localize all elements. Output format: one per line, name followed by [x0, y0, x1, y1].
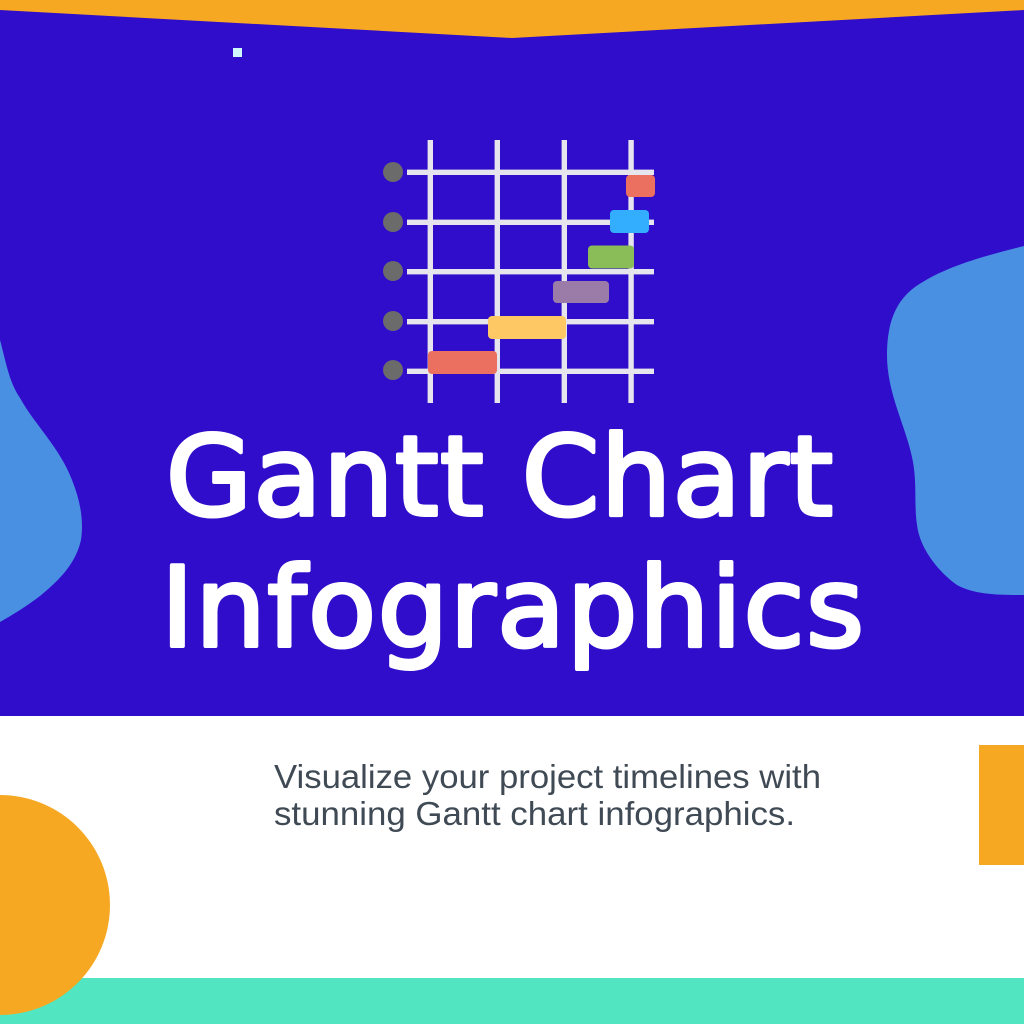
chart grid: [407, 140, 654, 403]
orange circle: [0, 795, 110, 1015]
panel: indigo hero background: [0, 0, 1024, 716]
title: [161, 413, 864, 673]
title: Gantt Chart: [166, 413, 833, 542]
left blue blob: [0, 340, 82, 622]
orange square: [979, 745, 1024, 865]
icon: gantt chart: [383, 140, 655, 403]
panel: white lower section: [0, 716, 1024, 1024]
row markers: [383, 162, 403, 380]
small pale square accent: [233, 48, 242, 57]
subtitle text: [274, 758, 821, 832]
subtitle text: stunning Gantt chart infographics.: [274, 795, 795, 832]
top orange banner: [0, 0, 1024, 38]
subtitle text: Visualize your project timelines with: [274, 758, 821, 795]
title: Infographics: [161, 544, 864, 673]
mint bottom bar: [0, 978, 1024, 1024]
right blue blob: [887, 246, 1024, 595]
task bars: [428, 175, 655, 374]
